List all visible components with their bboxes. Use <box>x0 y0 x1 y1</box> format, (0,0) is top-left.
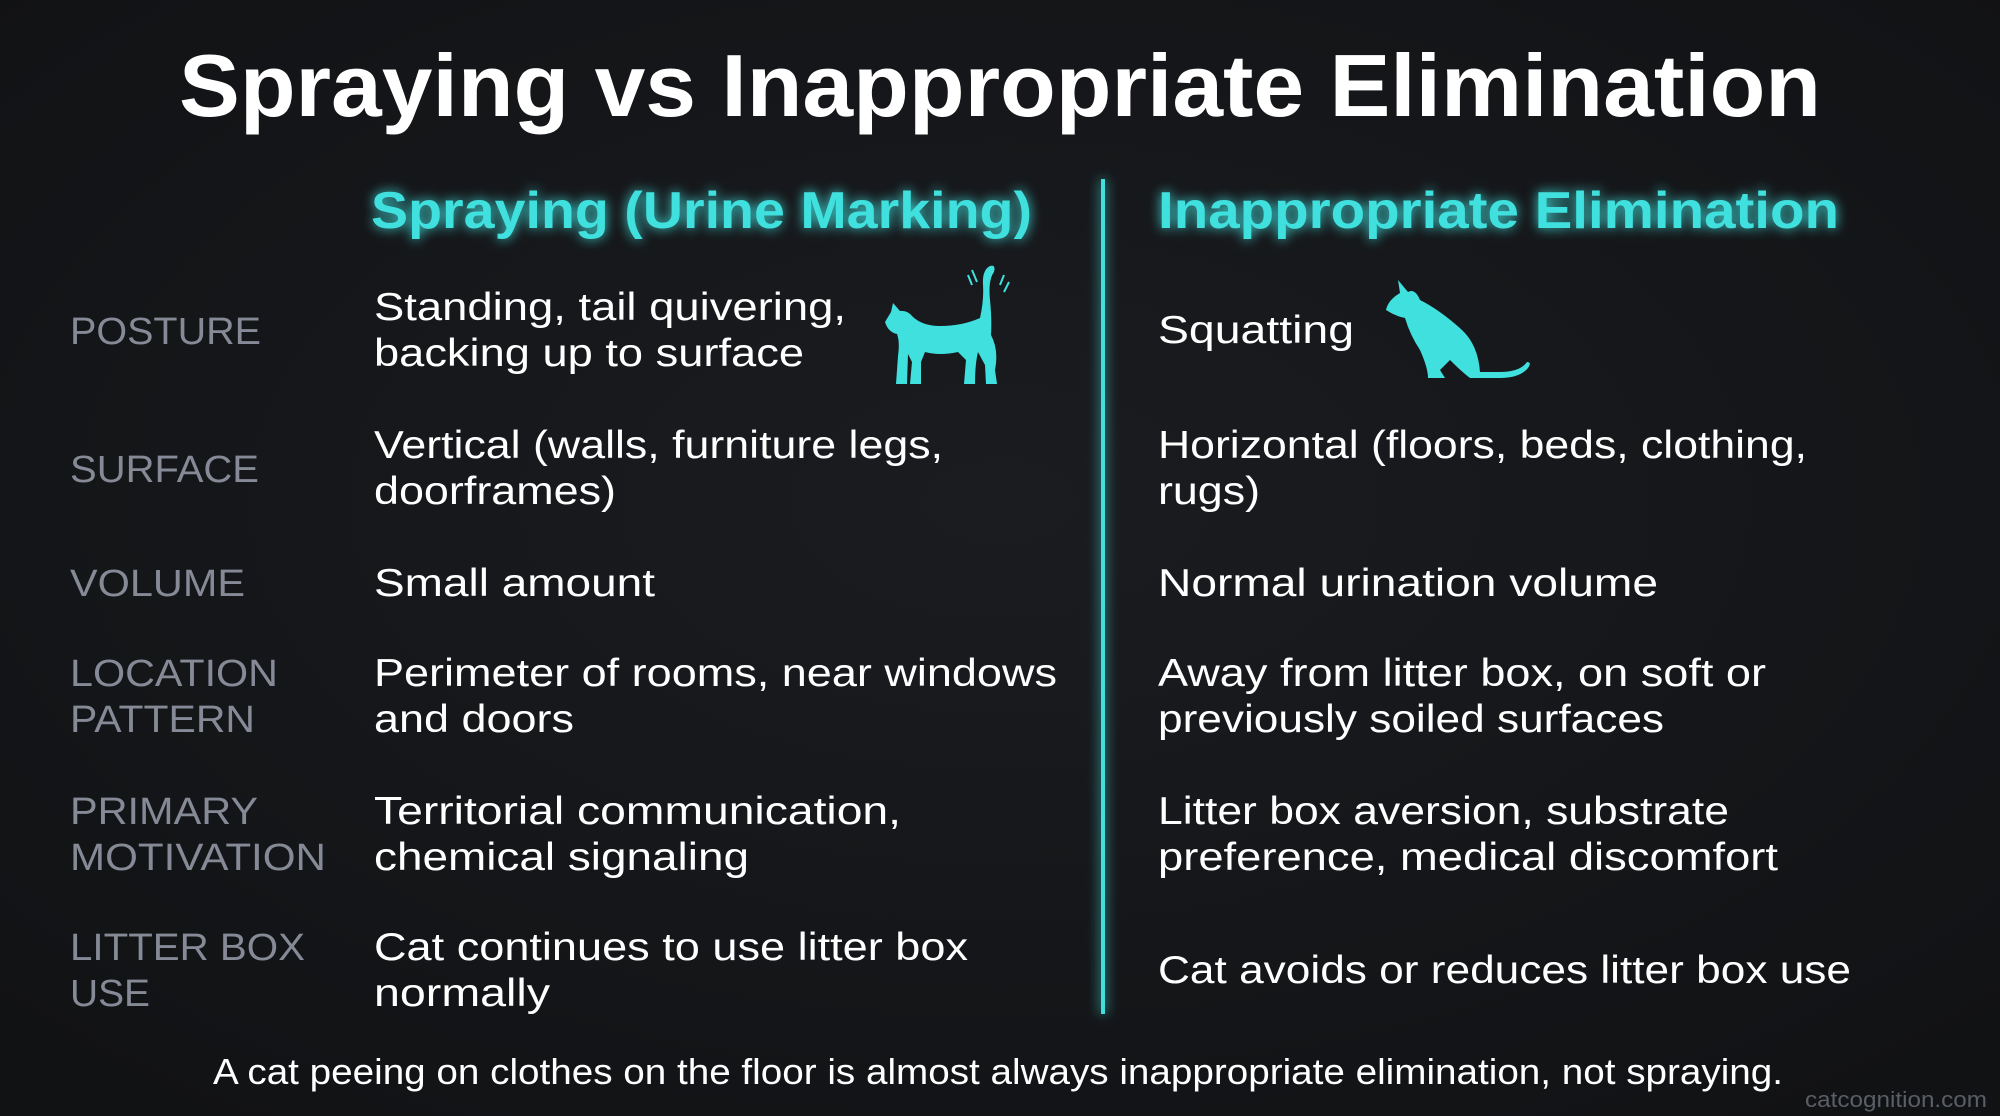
spraying column text: chemical signaling <box>374 836 749 879</box>
elimination column text: previously soiled surfaces <box>1158 698 1664 741</box>
elimination column text: Squatting <box>1158 309 1354 352</box>
watermark: catcognition.com <box>1805 1087 1987 1112</box>
spraying column text: Standing, tail quivering, <box>374 286 846 329</box>
spraying column text: doorframes) <box>374 470 616 513</box>
row labels: PRIMARY <box>70 791 258 833</box>
icon: standing cat with quivering tail <box>885 266 1009 384</box>
elimination column text: preference, medical discomfort <box>1158 836 1778 879</box>
row labels: LITTER BOX <box>70 927 305 969</box>
header: spraying: Spraying (Urine Marking) <box>371 182 1032 240</box>
spraying column text: backing up to surface <box>374 332 804 375</box>
header: inappropriate elimination: Inappropriate Elimination <box>1158 182 1839 240</box>
row labels: VOLUME <box>70 563 245 605</box>
elimination column text: Litter box aversion, substrate <box>1158 790 1729 833</box>
row labels <box>70 311 326 1015</box>
spraying column text: Vertical (walls, furniture legs, <box>374 424 943 467</box>
row labels: MOTIVATION <box>70 837 326 879</box>
spraying column text: Small amount <box>374 562 655 605</box>
row labels: LOCATION <box>70 653 278 695</box>
row labels: PATTERN <box>70 699 255 741</box>
spraying column text: Perimeter of rooms, near windows <box>374 652 1057 695</box>
spraying column text: Territorial communication, <box>374 790 901 833</box>
elimination column text: Horizontal (floors, beds, clothing, <box>1158 424 1807 467</box>
elimination column text: Cat avoids or reduces litter box use <box>1158 949 1851 992</box>
spraying column text: normally <box>374 972 551 1015</box>
spraying column text: Cat continues to use litter box <box>374 926 969 969</box>
icon: squatting cat <box>1386 280 1530 378</box>
row labels: SURFACE <box>70 449 259 491</box>
title: Spraying vs Inappropriate Elimination <box>179 36 1821 135</box>
elimination column text: Normal urination volume <box>1158 562 1658 605</box>
row labels: USE <box>70 973 150 1015</box>
divider <box>1101 179 1105 1014</box>
elimination column text <box>1158 309 1851 992</box>
elimination column text: Away from litter box, on soft or <box>1158 652 1766 695</box>
footer note: A cat peeing on clothes on the floor is almost always inappropriate elimination, not spraying. <box>213 1051 1783 1092</box>
spraying column text <box>374 286 1057 1015</box>
spraying column text: and doors <box>374 698 574 741</box>
elimination column text: rugs) <box>1158 470 1260 513</box>
row labels: POSTURE <box>70 311 261 353</box>
